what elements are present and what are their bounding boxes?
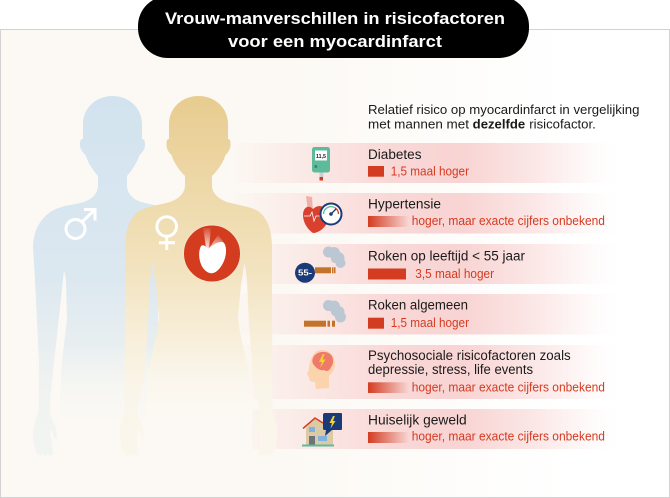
- row: diabetes: Diabetes: [368, 147, 422, 162]
- icon: glucose meter: 11,5: [316, 154, 326, 160]
- figure: woman silhouette: [120, 96, 277, 457]
- figure: man silhouette: [33, 96, 192, 457]
- row: diabetes: [368, 147, 469, 178]
- intro text: [368, 102, 640, 132]
- row: roken op leeftijd onder 55: Roken op leeftijd < 55 jaar: [368, 249, 525, 264]
- row: roken algemeen: 1,5 maal hoger: [391, 316, 469, 330]
- icon: heart in red circle: [184, 225, 240, 282]
- intro text: met mannen met: [368, 116, 469, 132]
- row: huiselijk geweld: Huiselijk geweld: [368, 412, 467, 427]
- row: psychosociale risicofactoren: hoger, maar exacte cijfers onbekend: [412, 380, 605, 394]
- icon: cigarette with 55- badge: [295, 246, 346, 283]
- intro text: dezelfde: [473, 116, 525, 132]
- title pill: [138, 0, 529, 58]
- row: roken op leeftijd onder 55: [368, 249, 525, 281]
- title pill: voor een myocardinfarct: [228, 32, 442, 51]
- title pill: Vrouw-manverschillen in risicofactoren: [165, 9, 505, 28]
- intro text: risicofactor.: [529, 116, 596, 132]
- icon: female symbol: [157, 217, 176, 250]
- icon: cigarette with smoke: [304, 300, 346, 327]
- row: diabetes: 1,5 maal hoger: [391, 164, 469, 178]
- row: huiselijk geweld: [368, 412, 605, 444]
- row: huiselijk geweld: hoger, maar exacte cijfers onbekend: [412, 430, 605, 444]
- intro text: Relatief risico op myocardinfarct in vergelijking: [368, 102, 640, 117]
- row: psychosociale risicofactoren: [368, 348, 605, 394]
- icon: cigarette with 55- badge: 55-: [298, 268, 312, 278]
- row: psychosociale risicofactoren: depressie, stress, life events: [368, 362, 533, 377]
- icon: heart with blood pressure gauge: [303, 196, 342, 233]
- icon: head with brain and lightning: [307, 350, 335, 389]
- icon: glucose meter: [312, 147, 330, 180]
- row: roken op leeftijd onder 55: 3,5 maal hoger: [415, 267, 494, 281]
- row: psychosociale risicofactoren: Psychosociale risicofactoren zoals: [368, 348, 571, 363]
- row: hypertensie: [368, 196, 605, 228]
- row: roken algemeen: [368, 298, 469, 330]
- row: hypertensie: Hypertensie: [368, 196, 441, 212]
- icon: house with speech bubble: [302, 413, 342, 446]
- risk bands: [225, 143, 620, 449]
- icon: male symbol: [66, 210, 95, 238]
- row: hypertensie: hoger, maar exacte cijfers onbekend: [412, 214, 605, 228]
- row: roken algemeen: Roken algemeen: [368, 298, 468, 312]
